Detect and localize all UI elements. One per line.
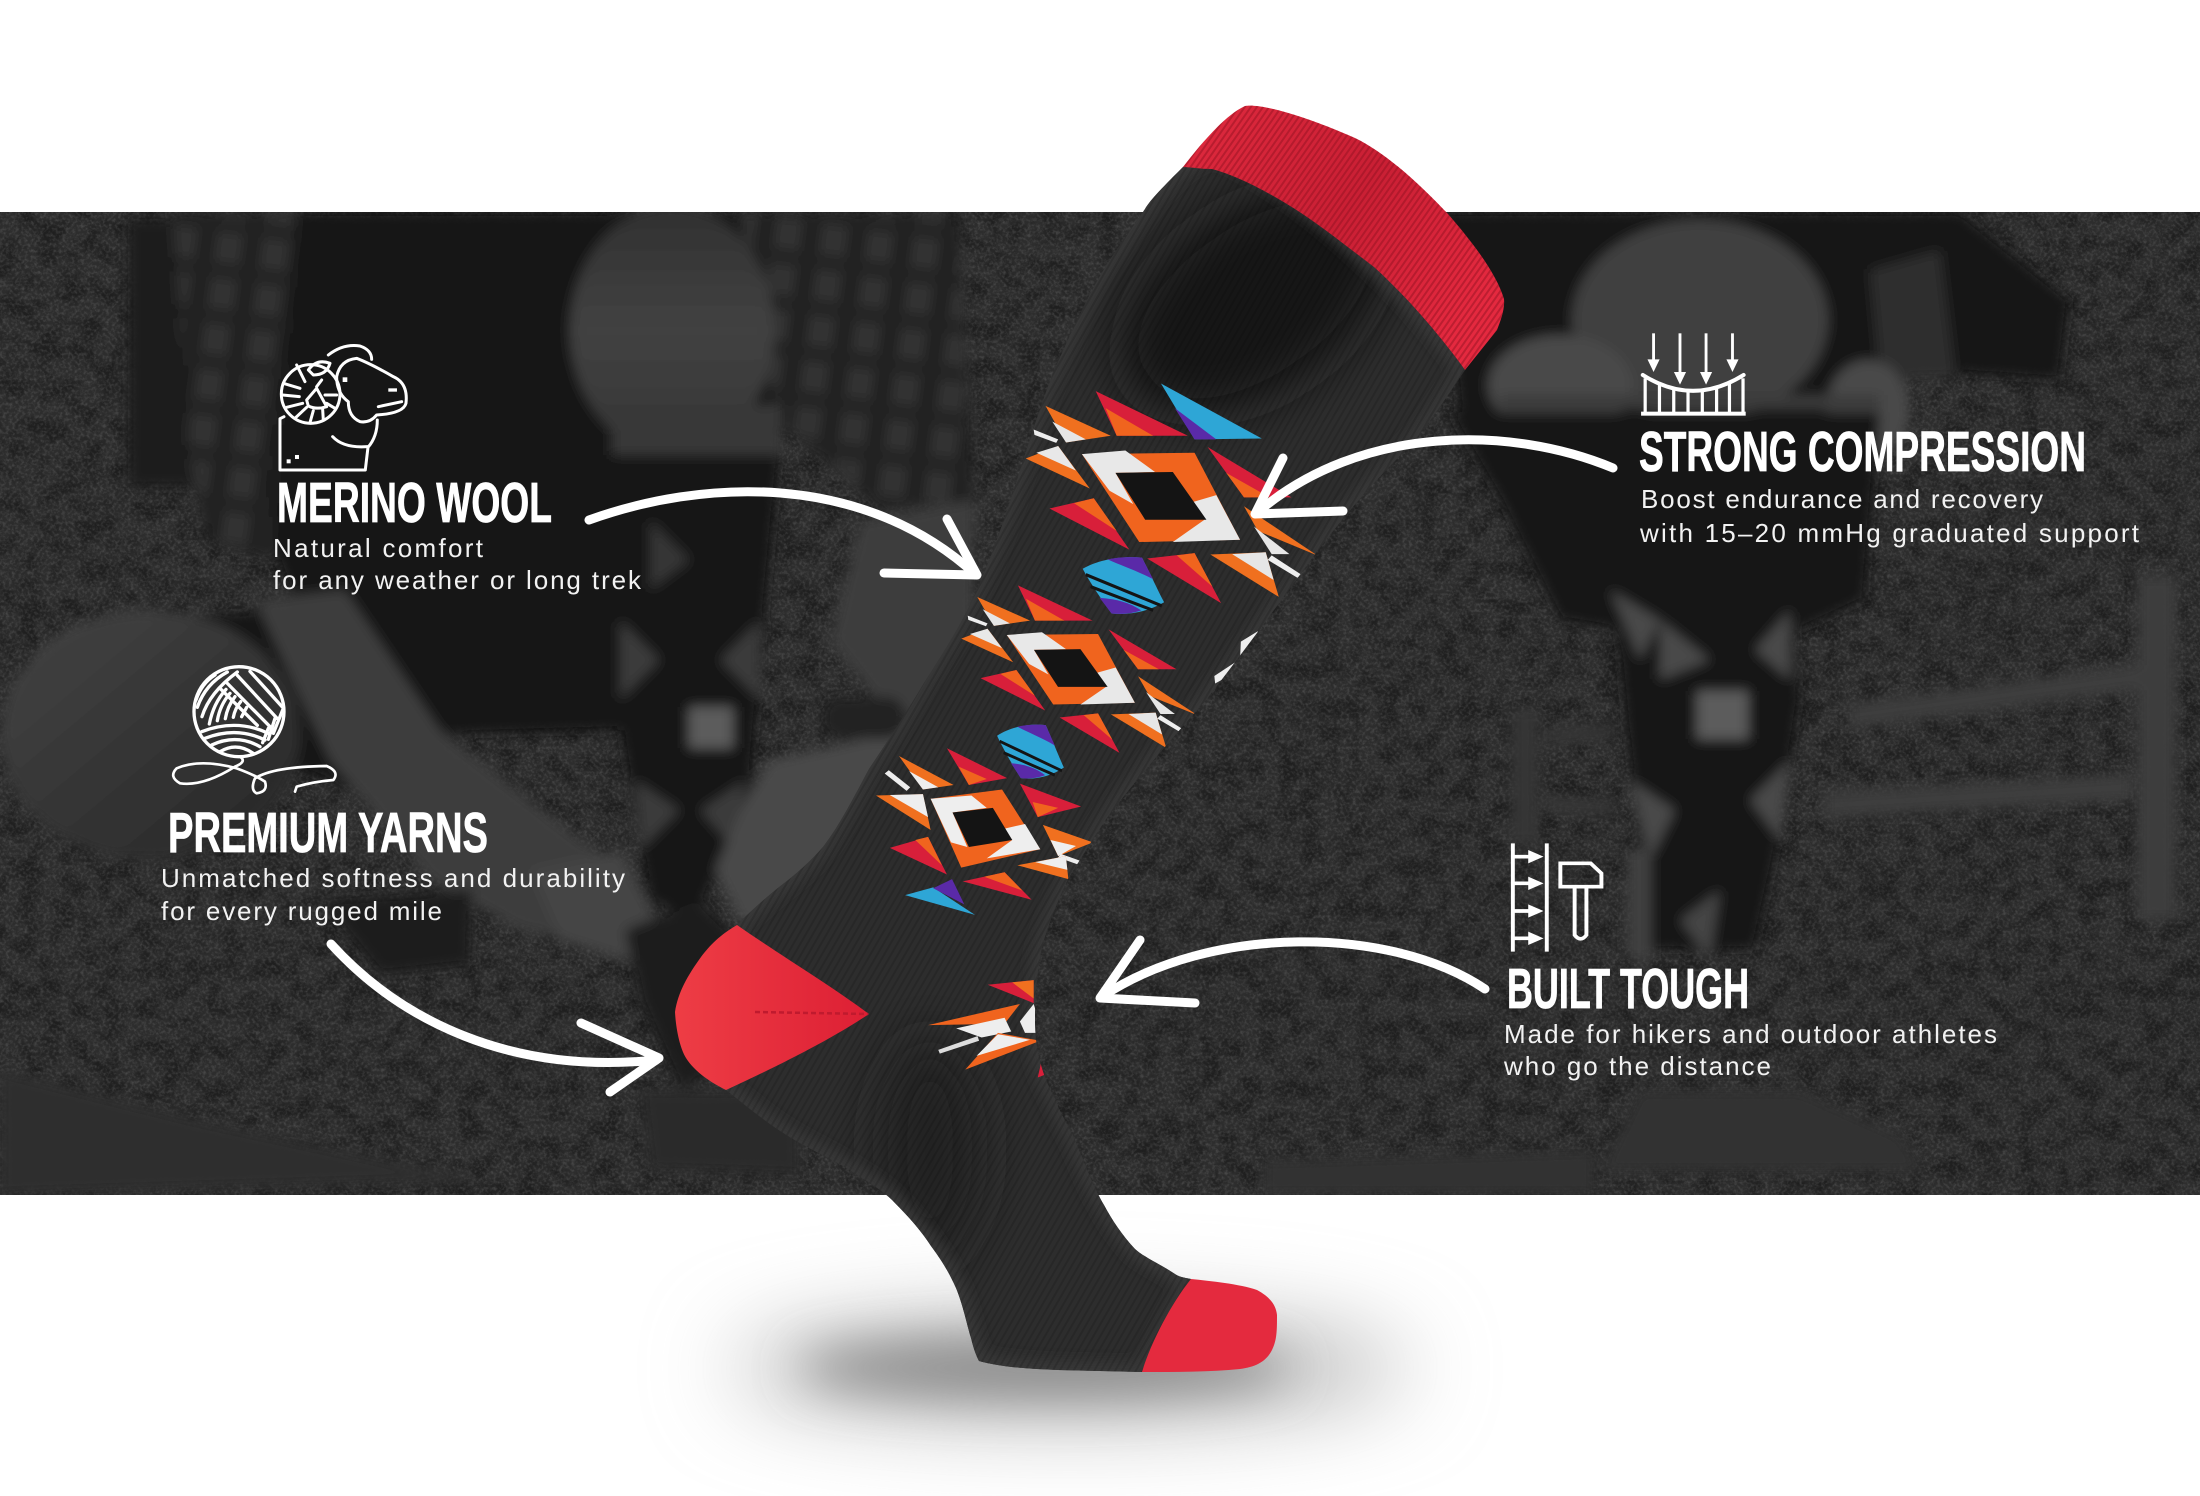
pattern: middle diamond — [961, 585, 1197, 753]
text block: with 15–20 mmHg graduated support — [1639, 518, 2140, 548]
photo band: hikers background — [0, 205, 2200, 1195]
text block: for every rugged mile — [161, 896, 442, 926]
arrow: merino wool — [589, 492, 977, 575]
pattern: blue oval 2 — [997, 725, 1064, 779]
pattern: ankle motif — [928, 980, 1044, 1078]
right figure — [1440, 212, 2070, 420]
red toe — [1142, 1279, 1277, 1372]
feature: premium yarns — [161, 667, 625, 926]
pattern: wrap-around white marks — [1214, 631, 1259, 684]
pattern: upper diamond — [1026, 384, 1317, 603]
heading: BUILT TOUGH — [1507, 957, 1749, 1021]
icon: yarn ball — [173, 667, 336, 793]
product: compression sock — [675, 106, 1504, 1372]
feature: merino wool — [273, 346, 642, 595]
sock ground shadow — [730, 1318, 1410, 1418]
text block: Natural comfort — [273, 533, 484, 563]
text block: for any weather or long trek — [273, 565, 642, 595]
red cuff — [1183, 106, 1504, 370]
feature: strong compression — [1639, 333, 2140, 548]
text block: who go the distance — [1503, 1051, 1771, 1081]
pattern: lower diamond — [876, 748, 1093, 915]
icon: compression arrows — [1641, 333, 1746, 416]
sock body — [727, 166, 1465, 1372]
left figure — [128, 219, 204, 487]
arrow: premium yarns — [331, 944, 659, 1092]
icon: wall and hammer — [1513, 843, 1601, 952]
icon: ram — [280, 346, 406, 470]
text block: Made for hikers and outdoor athletes — [1504, 1019, 1997, 1049]
arrow: built tough — [1100, 940, 1485, 1003]
text block: Unmatched softness and durability — [161, 863, 625, 893]
red heel — [675, 925, 869, 1090]
pattern: blue oval 1 — [1083, 557, 1164, 614]
heading: PREMIUM YARNS — [168, 801, 488, 865]
text block: Boost endurance and recovery — [1641, 484, 2043, 514]
heading: MERINO WOOL — [277, 471, 552, 535]
arrow: strong compression — [1255, 440, 1613, 514]
feature: built tough — [1503, 843, 1997, 1081]
